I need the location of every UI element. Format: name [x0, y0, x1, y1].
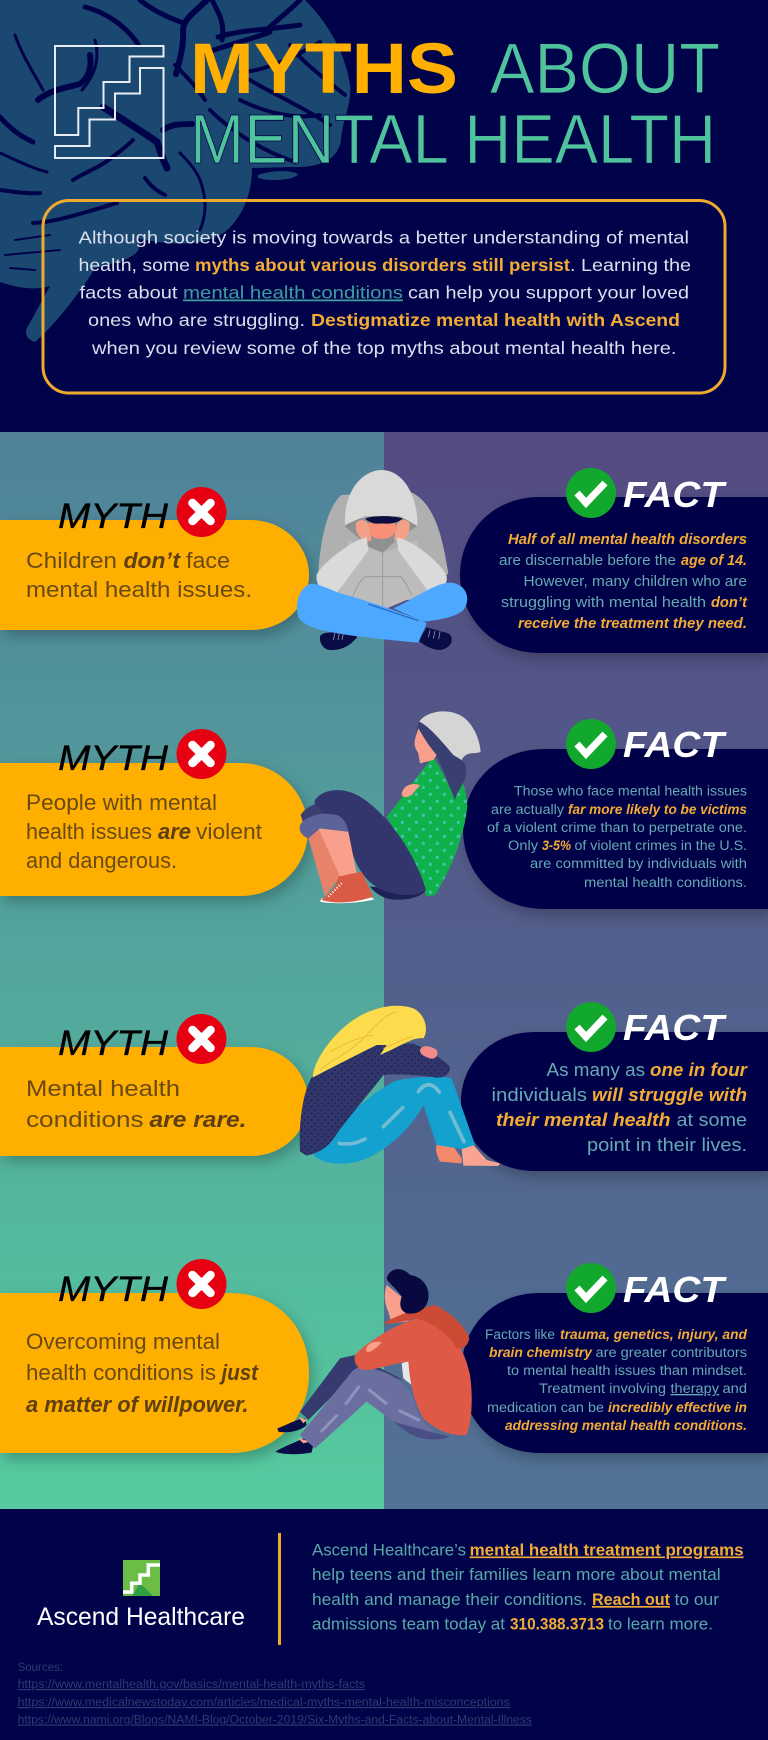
panel: introduction: Although society is moving towards a better understanding of mental	[78, 228, 689, 248]
panel: introduction: myths about various disorders still persist	[195, 255, 570, 275]
title: MENTAL HEALTH	[190, 100, 716, 178]
fact 3: will struggle with	[592, 1084, 747, 1105]
illustration: man in red hoodie	[275, 1269, 472, 1454]
sources: https://www.medicalnewstoday.com/articles/medical-myths-mental-health-misconceptions	[18, 1697, 510, 1709]
panel: introduction: mental health conditions	[183, 282, 403, 302]
title: ABOUT	[490, 30, 720, 109]
fact 2: are committed by individuals with	[530, 856, 747, 871]
sources: https://www.nami.org/Blogs/NAMI-Blog/October-2019/Six-Myths-and-Facts-about-Mental-Illness	[18, 1714, 532, 1726]
myth 4: health conditions is	[26, 1360, 216, 1385]
myth 3: conditions	[26, 1107, 144, 1132]
footer: logo	[37, 1560, 245, 1631]
myth 4	[0, 1259, 309, 1453]
fact 3: at some	[676, 1109, 747, 1130]
panel: fact column background	[384, 432, 768, 1509]
fact 2: are actually	[491, 802, 564, 817]
myth 4: Overcoming mental	[26, 1329, 220, 1354]
title	[190, 30, 720, 178]
myth 3	[0, 1014, 308, 1156]
panel: introduction: can help you support your loved	[408, 282, 689, 302]
fact 4: addressing mental health conditions.	[505, 1418, 747, 1433]
panel: introduction: when you review some of the top myths about mental health here.	[91, 338, 677, 358]
fact 4: Factors like	[485, 1327, 555, 1342]
fact 3: individuals	[492, 1084, 587, 1105]
myth 1	[0, 487, 309, 630]
myth 4: a matter of willpower.	[26, 1392, 248, 1417]
fact 2: of a violent crime than to perpetrate one.	[487, 820, 747, 835]
fact 4: and	[722, 1381, 747, 1396]
fact 3	[461, 1002, 768, 1171]
footer: logo: Ascend Healthcare	[37, 1603, 245, 1631]
illustration: hooded child sitting cross-legged	[297, 470, 467, 650]
fact 1: FACT	[623, 474, 727, 515]
fact 4: incredibly effective in	[608, 1400, 747, 1415]
panel: introduction: . Learning the	[570, 255, 691, 275]
footer: call to action: admissions team today at	[312, 1616, 505, 1634]
myth 2: health issues	[26, 819, 152, 844]
fact 3: their mental health	[496, 1109, 670, 1130]
fact 2: mental health conditions.	[584, 875, 747, 890]
panel: myth column background	[0, 432, 384, 1509]
fact 2: of violent crimes in the U.S.	[574, 838, 747, 853]
fact 1: age of 14.	[681, 553, 747, 569]
fact 1: Half of all mental health disorders	[508, 532, 747, 548]
myth 2	[0, 729, 308, 896]
fact 2: far more likely to be victims	[568, 802, 747, 817]
fact 4: therapy	[670, 1381, 719, 1396]
myth 4: MYTH	[58, 1270, 169, 1309]
fact 4: trauma, genetics, injury, and	[560, 1327, 748, 1342]
fact 4: medication can be	[487, 1400, 604, 1415]
footer: call to action: mental health treatment programs	[470, 1542, 744, 1560]
footer: call to action: 310.388.3713	[510, 1616, 604, 1634]
myth 3: Mental health	[26, 1076, 180, 1101]
fact 1: However, many children who are	[524, 574, 747, 590]
myth 2: violent	[196, 819, 262, 844]
myth 3: are rare.	[150, 1107, 246, 1132]
myth 2: and dangerous.	[26, 848, 177, 873]
footer: call to action: help teens and their families learn more about mental	[312, 1566, 721, 1584]
fact 1	[460, 468, 768, 653]
icon: staircase logo outline	[55, 46, 164, 158]
fact 3: point in their lives.	[587, 1134, 747, 1155]
footer: call to action: health and manage their conditions.	[312, 1591, 587, 1609]
footer: call to action	[312, 1542, 744, 1634]
fact 3: one in four	[650, 1059, 749, 1080]
fact 4: to mental health issues than mindset.	[507, 1363, 747, 1378]
fact 3: As many as	[546, 1059, 645, 1080]
fact 4: are greater contributors	[596, 1345, 747, 1360]
myth 1: face	[186, 548, 230, 573]
illustration: blonde woman hugging knees	[300, 1006, 500, 1166]
fact 2	[463, 719, 768, 909]
myth 2: MYTH	[58, 739, 169, 778]
myth 4: just	[219, 1360, 260, 1385]
panel: introduction	[43, 200, 725, 393]
sources: Sources:	[18, 1662, 63, 1674]
sources	[18, 1662, 532, 1726]
fact 4: Treatment involving	[539, 1381, 666, 1396]
panel: introduction: facts about	[80, 282, 178, 302]
fact 2: Only	[508, 838, 538, 853]
footer: call to action: Ascend Healthcare’s	[312, 1542, 466, 1560]
panel: introduction: Destigmatize mental health with Ascend	[311, 310, 680, 330]
panel: introduction: ones who are struggling.	[88, 310, 305, 330]
illustration: woman with grey hat and green poncho	[300, 711, 481, 903]
fact 3: FACT	[623, 1007, 727, 1048]
brain graphic	[0, 0, 350, 342]
fact 2: 3-5%	[542, 838, 571, 853]
sources: https://www.mentalhealth.gov/basics/mental-health-myths-facts	[18, 1679, 365, 1691]
myth 1: MYTH	[58, 497, 169, 536]
fact 1: are discernable before the	[499, 553, 676, 569]
footer: call to action: Reach out	[592, 1591, 670, 1609]
fact 1: receive the treatment they need.	[518, 616, 747, 632]
panel: introduction: health, some	[78, 255, 190, 275]
myth 2: People with mental	[26, 790, 217, 815]
fact 4: FACT	[623, 1269, 727, 1310]
footer: call to action: to our	[674, 1591, 720, 1609]
myth 1: mental health issues.	[26, 577, 252, 602]
fact 2: Those who face mental health issues	[514, 784, 747, 798]
fact 4	[461, 1263, 768, 1453]
fact 2: FACT	[623, 724, 727, 765]
myth 2: are	[158, 819, 191, 844]
fact 1: struggling with mental health	[501, 595, 706, 611]
fact 1: don’t	[711, 595, 748, 611]
myth 1: Children	[26, 548, 117, 573]
footer divider	[278, 1533, 281, 1645]
fact 4: brain chemistry	[489, 1345, 594, 1360]
footer: call to action: to learn more.	[608, 1616, 713, 1634]
myth 1: don’t	[124, 548, 182, 573]
myth 3: MYTH	[58, 1024, 169, 1063]
title: MYTHS	[190, 30, 458, 109]
